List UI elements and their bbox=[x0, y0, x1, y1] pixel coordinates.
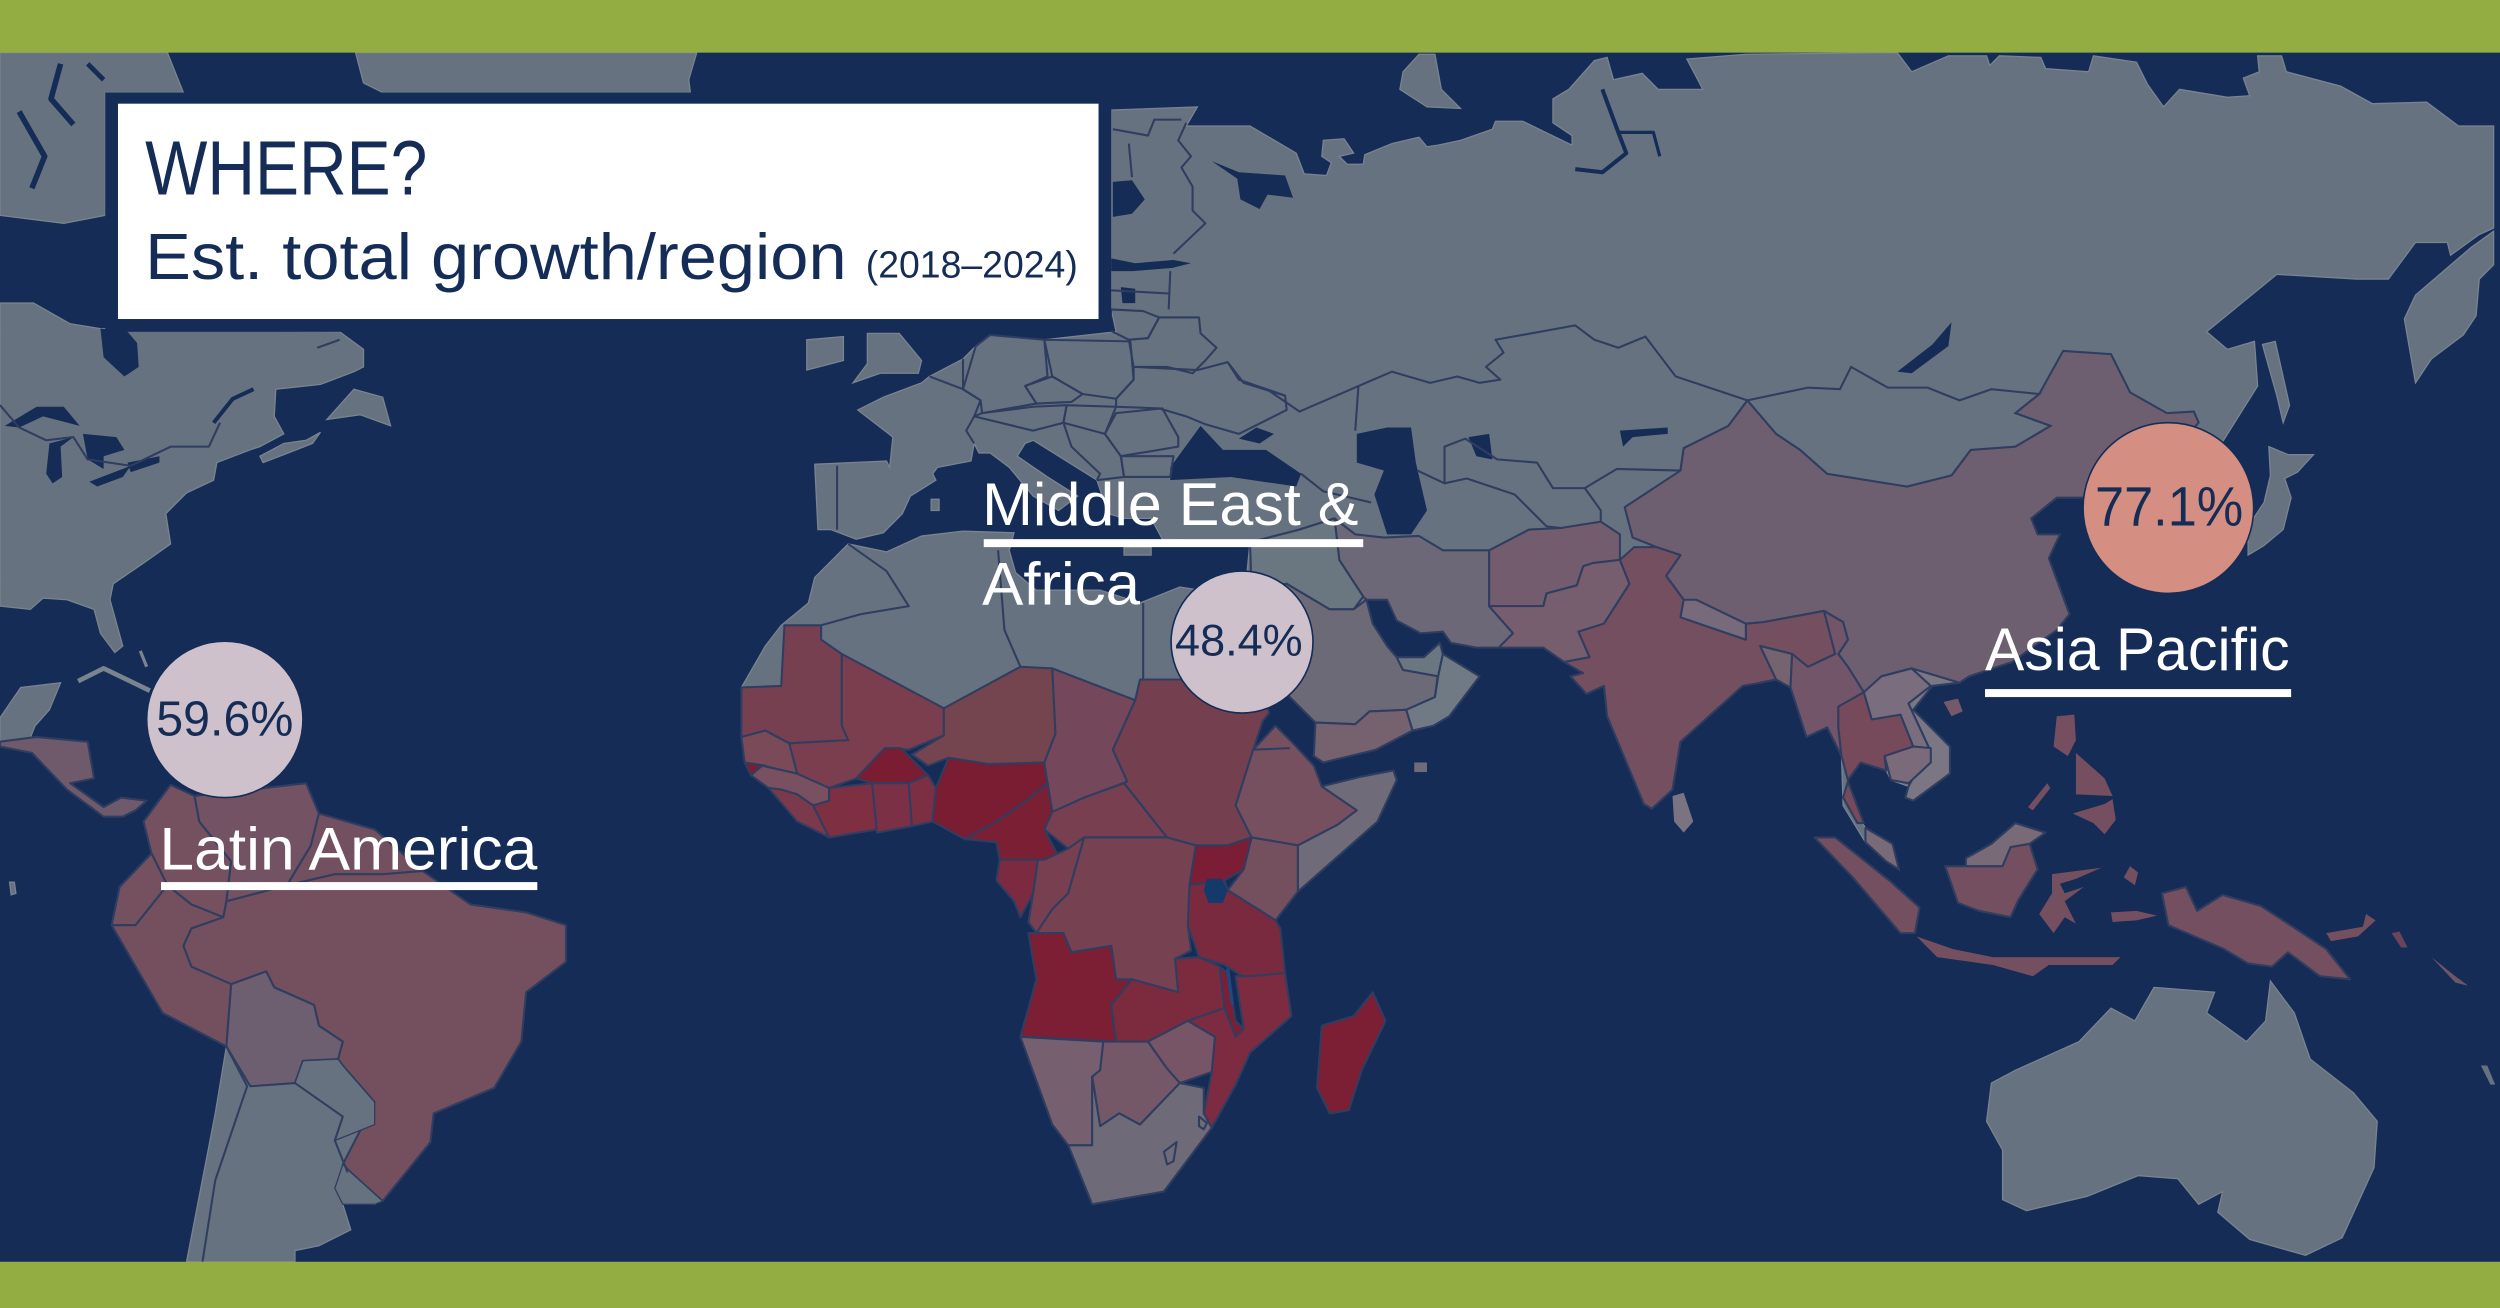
bubble: 77.1% bbox=[2083, 423, 2254, 593]
title panel bbox=[105, 93, 1111, 332]
date range: (2018–2024) bbox=[866, 244, 1078, 287]
bubble: 77.1%: 77.1% bbox=[2095, 475, 2243, 538]
label: Asia Pacific: Asia Pacific bbox=[1985, 615, 2290, 683]
bubble: 59.6% bbox=[147, 641, 303, 798]
bottom green band bbox=[0, 1262, 2500, 1308]
bubble: 48.4% bbox=[1171, 571, 1313, 713]
callout: Latin America bbox=[147, 641, 538, 890]
land: Central America bbox=[0, 737, 147, 817]
label: Middle East & Africa bbox=[982, 470, 1363, 618]
heading: WHERE? bbox=[145, 127, 427, 212]
land: North America bbox=[0, 53, 391, 895]
top green band bbox=[0, 0, 2500, 53]
callout: Middle East and Africa bbox=[982, 470, 1363, 713]
land: Greenland bbox=[356, 53, 697, 93]
label: Latin America: Latin America bbox=[159, 814, 538, 882]
land: South America bbox=[112, 783, 566, 1262]
countries: Asia Pacific bbox=[1335, 351, 2495, 1085]
countries: Africa bbox=[741, 531, 1397, 1204]
borders: Europe and Central Asia bbox=[837, 120, 1747, 542]
bubble: 48.4%: 48.4% bbox=[1175, 617, 1303, 666]
callout: Asia Pacific bbox=[1985, 423, 2291, 697]
land: Eurasia bbox=[807, 53, 2494, 869]
label: Middle East & Africa: Middle East & bbox=[982, 470, 1358, 538]
countries: Middle East bbox=[1250, 518, 1480, 772]
label: Middle East & Africa: Africa bbox=[982, 550, 1140, 618]
bubble: 59.6%: 59.6% bbox=[156, 691, 293, 746]
land: Australia bbox=[1987, 981, 2377, 1255]
subheading: Est. total growth/region bbox=[145, 220, 847, 293]
